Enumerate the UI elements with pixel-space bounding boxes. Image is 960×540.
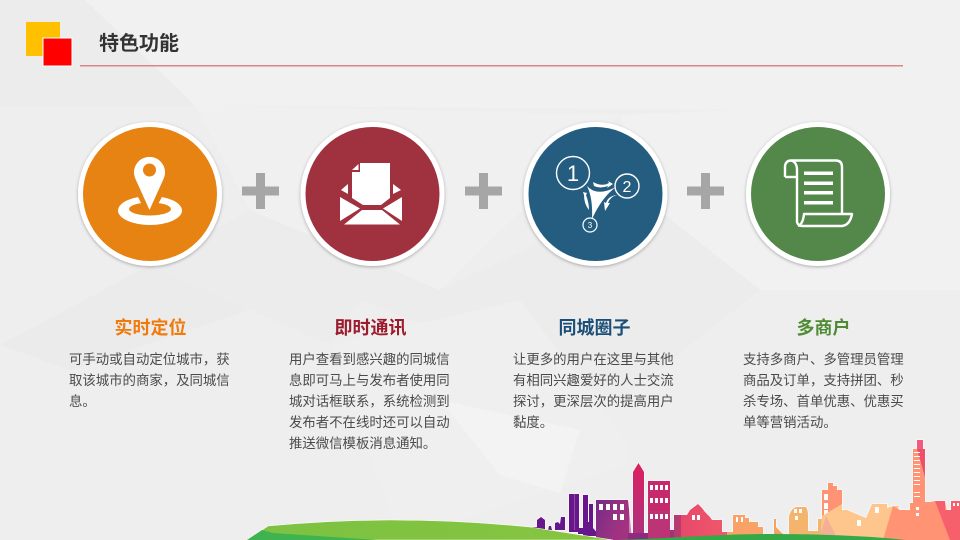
text: city circle: 有相同兴趣爱好的人士交流	[513, 373, 674, 388]
text: city circle: 黏度。	[513, 415, 553, 430]
text: messaging	[289, 352, 450, 451]
green hill right	[615, 534, 906, 540]
text: city circle: 让更多的用户在这里与其他	[513, 352, 674, 367]
circle icon: location	[78, 122, 222, 266]
green hill left	[247, 520, 613, 540]
text: city circle: 探讨，更深层次的提高用户	[513, 390, 674, 410]
tall tower and salmon block	[883, 440, 952, 540]
logo squares	[26, 22, 72, 66]
text: multi-merchant: 商品及订单，支持拼团、秒	[743, 369, 904, 389]
circle icon: scroll	[746, 122, 890, 266]
circle icon: three-step cycle: 3	[588, 221, 593, 230]
text: location: 取该城市的商家，及同城信	[69, 369, 230, 389]
text: messaging: 推送微信模板消息通知。	[289, 436, 436, 451]
heading: messaging: 即时通讯	[334, 318, 406, 338]
circle icon: envelope	[300, 122, 444, 266]
text: location: 息。	[69, 394, 96, 409]
text: location	[69, 348, 230, 409]
plus 2	[465, 173, 502, 209]
plus 1	[242, 173, 279, 209]
heading: location: 实时定位	[114, 318, 186, 338]
text: multi-merchant: 单等营销活动。	[743, 415, 837, 430]
skyline	[531, 440, 960, 540]
circle icon: three-step cycle: 1	[567, 161, 579, 186]
text: messaging: 城对话框联系，系统检测到	[289, 390, 450, 410]
circle icon: three-step cycle	[524, 122, 668, 266]
title: 特色功能	[99, 33, 179, 55]
peach hills	[820, 504, 899, 540]
text: location: 可手动或自动定位城市，获	[69, 348, 230, 368]
salmon stepped building	[822, 483, 842, 530]
text: multi-merchant	[743, 352, 904, 430]
text: messaging: 息即可马上与发布者使用同	[289, 373, 450, 388]
circle icon: three-step cycle: 2	[623, 179, 632, 196]
red house	[674, 504, 727, 540]
purple buildings	[531, 494, 600, 536]
text: messaging: 发布者不在线时还可以自动	[289, 415, 450, 430]
heading: city circle: 同城圈子	[558, 318, 630, 338]
crimson block	[648, 481, 670, 540]
text: multi-merchant: 支持多商户、多管理员管理	[743, 352, 904, 367]
text: city circle	[513, 352, 674, 430]
title rule	[80, 65, 903, 66]
text: multi-merchant: 杀专场、首单优惠、优惠买	[743, 394, 904, 409]
crimson tower	[633, 463, 644, 540]
peach blocks	[727, 515, 765, 540]
purple block	[596, 500, 629, 540]
text: messaging: 用户查看到感兴趣的同城信	[289, 352, 450, 367]
heading: multi-merchant: 多商户	[796, 318, 850, 338]
plus 3	[687, 173, 724, 209]
